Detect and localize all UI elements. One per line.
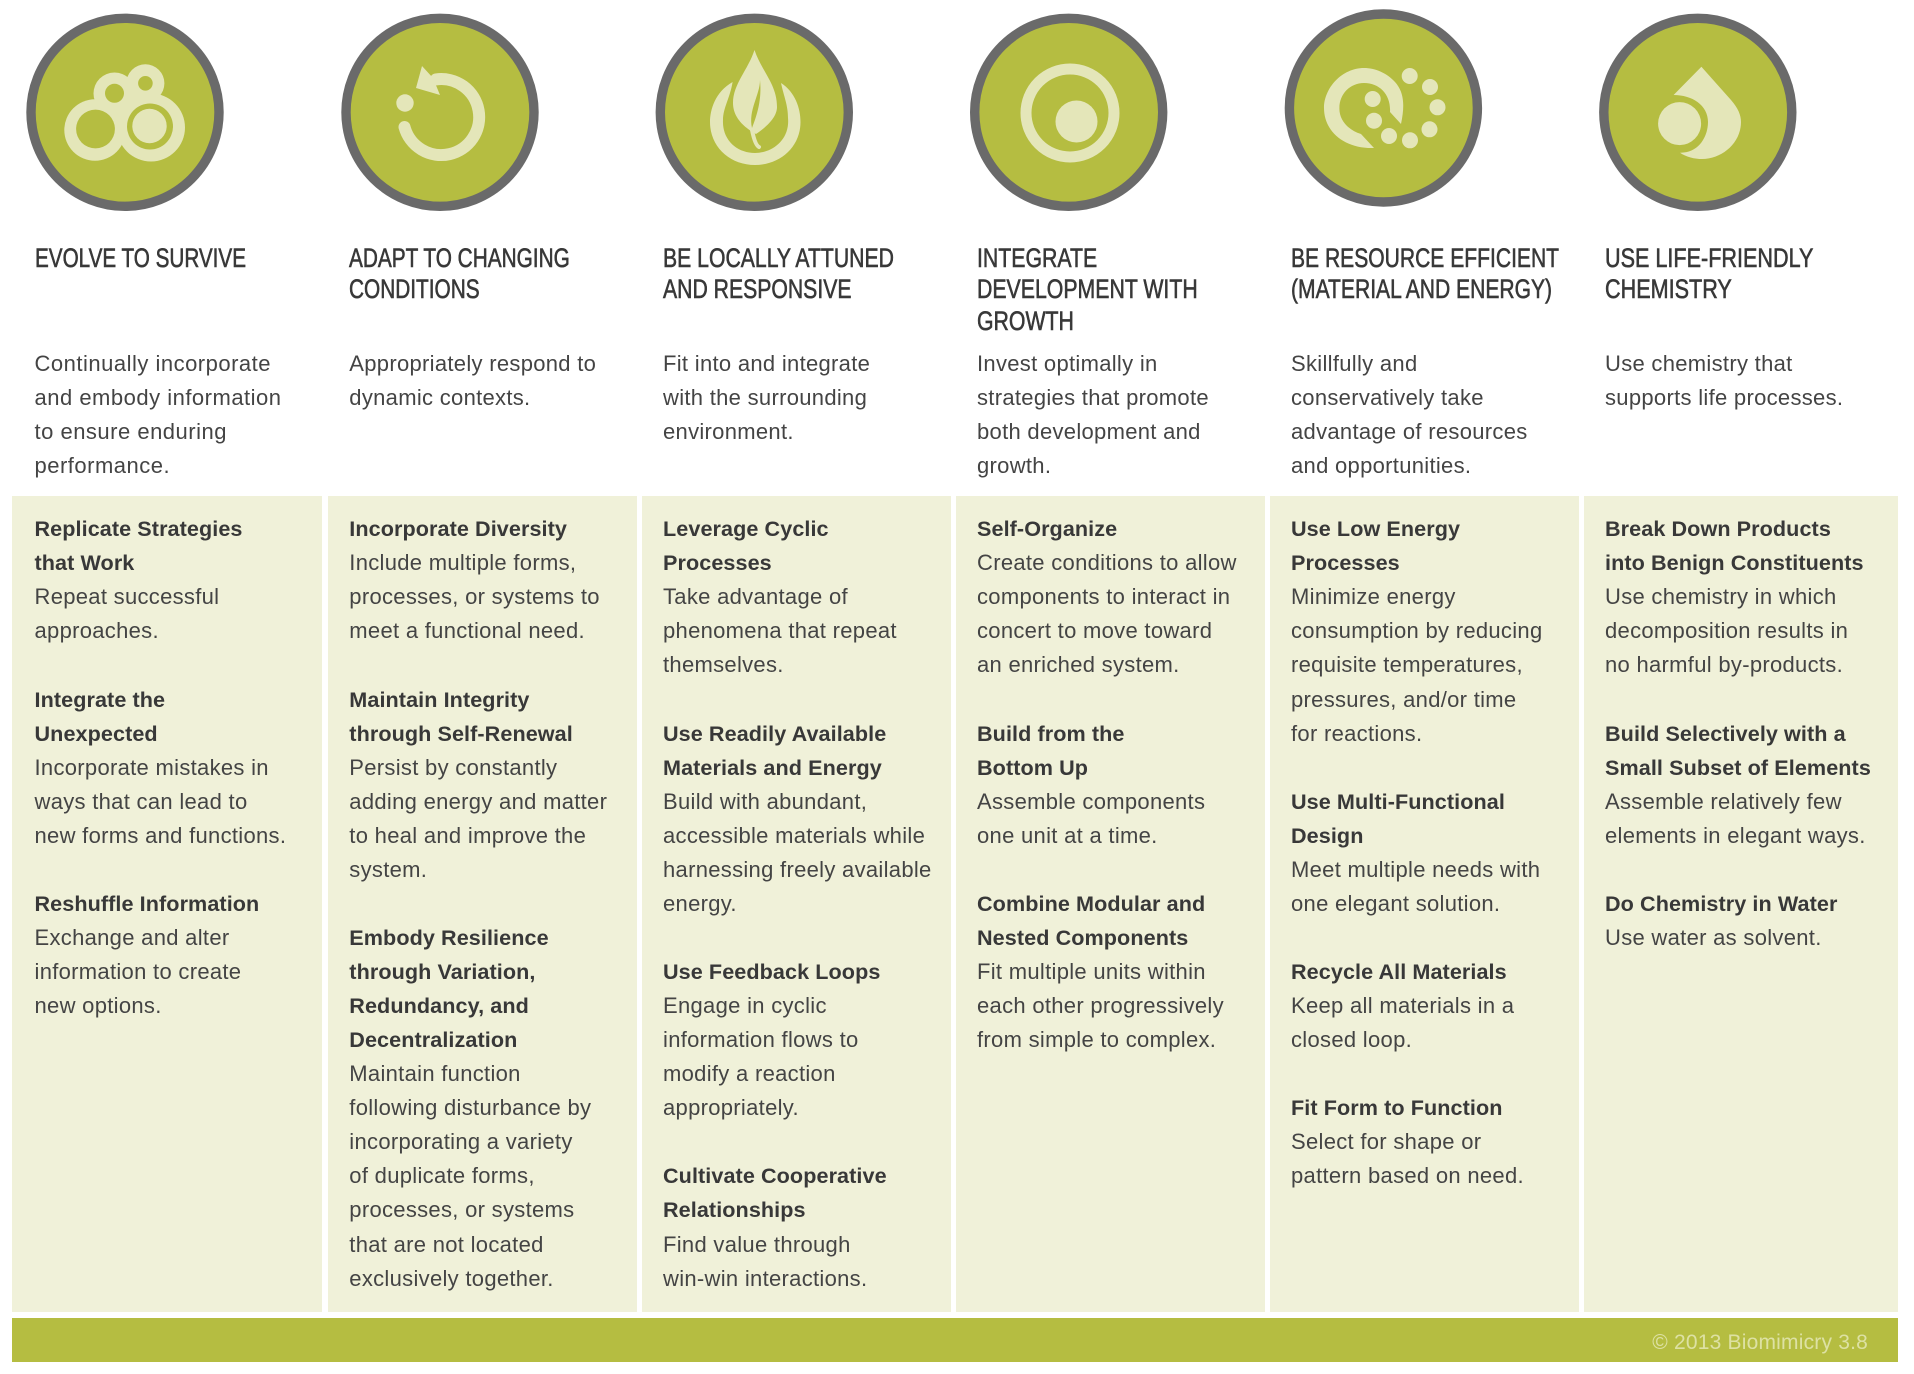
- item: leverage cyclic processes: Processes: [663, 550, 772, 575]
- item: readily available materials: harnessing freely available: [663, 857, 932, 882]
- intro text: evolve to survive: to ensure enduring: [34, 419, 227, 444]
- item: reshuffle information: [34, 891, 259, 1018]
- icon: be resource efficient: [1289, 14, 1477, 202]
- item: feedback loops: Engage in cyclic: [663, 993, 827, 1018]
- panel: evolve to survive strategies: [12, 496, 322, 1312]
- item: chemistry in water: Use water as solvent.: [1605, 925, 1822, 950]
- item: fit form to function: Fit Form to Function: [1291, 1095, 1502, 1120]
- item: embody resilience: exclusively together.: [349, 1266, 554, 1291]
- item: build from the bottom up: Build from the: [977, 721, 1124, 746]
- intro text: evolve to survive: performance.: [34, 453, 170, 478]
- item: fit form to function: pattern based on need.: [1291, 1163, 1524, 1188]
- item: leverage cyclic processes: Leverage Cyclic: [663, 516, 829, 541]
- item: embody resilience: Decentralization: [349, 1027, 517, 1052]
- item: chemistry in water: Do Chemistry in Water: [1605, 891, 1837, 916]
- item: incorporate diversity: Include multiple forms,: [349, 550, 576, 575]
- icon: use life-friendly chemistry: [1604, 18, 1792, 206]
- heading: use life-friendly chemistry: USE LIFE-FRIENDLY: [1605, 243, 1813, 273]
- item: incorporate diversity: processes, or systems to: [349, 584, 600, 609]
- item: low energy processes: requisite temperatures,: [1291, 652, 1523, 677]
- item: reshuffle information: information to create: [34, 959, 241, 984]
- heading: be resource efficient: [1291, 243, 1559, 304]
- item: self-organize: concert to move toward: [977, 618, 1212, 643]
- heading: be locally attuned and responsive: AND RESPONSIVE: [663, 274, 852, 304]
- item: self-organize: Create conditions to allow: [977, 550, 1237, 575]
- item: low energy processes: consumption by reducing: [1291, 618, 1542, 643]
- intro text: resource efficient: advantage of resources: [1291, 419, 1528, 444]
- item: chemistry in water: [1605, 891, 1838, 950]
- item: replicate strategies: that Work: [34, 550, 134, 575]
- item: self-organize: Self-Organize: [977, 516, 1117, 541]
- item: embody resilience: processes, or systems: [349, 1197, 574, 1222]
- item: cooperative relationships: win-win interactions.: [663, 1266, 867, 1291]
- heading: adapt to changing conditions: CONDITIONS: [349, 274, 480, 304]
- intro text: locally attuned: [663, 350, 870, 444]
- item: embody resilience: Maintain function: [349, 1061, 521, 1086]
- item: leverage cyclic processes: Take advantage of: [663, 584, 848, 609]
- item: recycle all materials: Keep all materials in a: [1291, 993, 1514, 1018]
- heading: adapt to changing conditions: ADAPT TO CHANGING: [349, 243, 570, 273]
- item: benign constituents: Use chemistry in which: [1605, 584, 1837, 609]
- item: multi-functional design: Meet multiple needs with: [1291, 857, 1540, 882]
- item: readily available materials: Build with abundant,: [663, 789, 867, 814]
- item: replicate strategies: approaches.: [34, 618, 159, 643]
- item: embody resilience: incorporating a variety: [349, 1129, 573, 1154]
- item: modular and nested: from simple to complex.: [977, 1027, 1216, 1052]
- item: build from the bottom up: Assemble components: [977, 789, 1205, 814]
- intro text: integrate development: strategies that promote: [977, 385, 1209, 410]
- icon: integrate development with growth: [975, 18, 1163, 206]
- item: self-organize: [977, 516, 1237, 677]
- item: multi-functional design: [1291, 789, 1540, 916]
- item: incorporate diversity: Incorporate Diversity: [349, 516, 567, 541]
- item: integrate the unexpected: [34, 686, 286, 848]
- item: low energy processes: Use Low Energy: [1291, 516, 1460, 541]
- item: embody resilience: through Variation,: [349, 959, 536, 984]
- item: modular and nested: Fit multiple units within: [977, 959, 1206, 984]
- item: modular and nested: Combine Modular and: [977, 891, 1205, 916]
- item: feedback loops: Use Feedback Loops: [663, 959, 880, 984]
- heading: use life-friendly chemistry: [1605, 243, 1814, 304]
- panel: locally attuned strategies: [642, 496, 951, 1312]
- item: multi-functional design: Design: [1291, 823, 1363, 848]
- panel: adapt strategies: [328, 496, 637, 1312]
- item: maintain integrity: Maintain Integrity: [349, 686, 530, 712]
- intro text: life-friendly chemistry: Use chemistry that: [1605, 350, 1793, 376]
- item: reshuffle information: Exchange and alter: [34, 925, 229, 950]
- item: modular and nested: each other progressively: [977, 993, 1224, 1018]
- item: reshuffle information: new options.: [34, 993, 162, 1018]
- panel: life-friendly chemistry strategies: [1584, 496, 1898, 1312]
- heading: evolve to survive: EVOLVE TO SURVIVE: [34, 243, 246, 273]
- icon: evolve to survive: [31, 18, 219, 206]
- item: feedback loops: [663, 959, 880, 1120]
- heading: be locally attuned and responsive: [662, 243, 894, 304]
- item: fit form to function: [1291, 1095, 1524, 1188]
- item: maintain integrity: through Self-Renewal: [349, 721, 573, 746]
- intro text: adapt: dynamic contexts.: [349, 385, 530, 410]
- item: multi-functional design: one elegant solution.: [1291, 891, 1500, 916]
- intro text: life-friendly chemistry: supports life processes.: [1605, 385, 1843, 410]
- heading: use life-friendly chemistry: CHEMISTRY: [1605, 274, 1732, 304]
- intro text: integrate development: growth.: [977, 453, 1051, 478]
- intro text: integrate development: Invest optimally in: [977, 350, 1158, 376]
- item: modular and nested: Nested Components: [977, 925, 1188, 950]
- item: embody resilience: Embody Resilience: [349, 925, 549, 950]
- intro text: resource efficient: conservatively take: [1291, 385, 1484, 410]
- icons row: [26, 9, 1796, 211]
- item: integrate the unexpected: Incorporate mistakes in: [34, 755, 269, 780]
- item: maintain integrity: [349, 686, 607, 882]
- item: low energy processes: Minimize energy: [1291, 584, 1456, 609]
- intro text: evolve to survive: [34, 350, 282, 478]
- intro text: life-friendly chemistry: [1605, 350, 1843, 410]
- item: maintain integrity: to heal and improve the: [349, 823, 586, 848]
- item: feedback loops: appropriately.: [663, 1095, 799, 1120]
- item: self-organize: an enriched system.: [977, 652, 1180, 677]
- heading: be locally attuned and responsive: BE LOCALLY ATTUNED: [663, 243, 894, 273]
- footer bar: [12, 1318, 1898, 1362]
- intro text: resource efficient: Skillfully and: [1291, 350, 1417, 376]
- item: incorporate diversity: meet a functional need.: [349, 618, 585, 643]
- item: maintain integrity: adding energy and matter: [349, 789, 607, 814]
- item: build selectively: Small Subset of Elements: [1605, 755, 1871, 780]
- item: benign constituents: [1605, 516, 1864, 677]
- item: integrate the unexpected: Integrate the: [34, 686, 165, 712]
- item: integrate the unexpected: new forms and functions.: [34, 823, 286, 848]
- intro text: locally attuned: with the surrounding: [663, 385, 867, 410]
- item: low energy processes: pressures, and/or time: [1291, 686, 1516, 712]
- item: leverage cyclic processes: [663, 516, 897, 677]
- icon: be locally attuned: [660, 18, 848, 206]
- item: feedback loops: modify a reaction: [663, 1061, 836, 1086]
- item: benign constituents: decomposition results in: [1605, 618, 1848, 643]
- heading: integrate development with growth: DEVELOPMENT WITH: [977, 274, 1198, 304]
- intro text: resource efficient: and opportunities.: [1291, 453, 1471, 478]
- item: readily available materials: Use Readily Available: [663, 721, 886, 746]
- item: embody resilience: that are not located: [349, 1232, 544, 1256]
- intro text: resource efficient: [1291, 350, 1528, 478]
- item: feedback loops: information flows to: [663, 1027, 859, 1052]
- intro text: evolve to survive: and embody information: [34, 385, 282, 410]
- item: build from the bottom up: [977, 721, 1205, 848]
- intro text: locally attuned: environment.: [663, 419, 794, 444]
- item: cooperative relationships: Cultivate Cooperative: [663, 1163, 887, 1188]
- heading: integrate development with growth: [977, 243, 1198, 336]
- intro text: adapt: [349, 350, 596, 410]
- item: cooperative relationships: Relationships: [663, 1197, 806, 1222]
- heading: be resource efficient: BE RESOURCE EFFICIENT: [1291, 243, 1559, 273]
- intro text: locally attuned: Fit into and integrate: [663, 350, 870, 376]
- item: recycle all materials: [1291, 959, 1514, 1052]
- panel: integrate development strategies: [956, 496, 1265, 1312]
- icon: adapt to changing conditions: [346, 18, 534, 206]
- item: build selectively: elements in elegant ways.: [1605, 823, 1866, 848]
- item: incorporate diversity: [349, 516, 600, 643]
- item: build from the bottom up: one unit at a time.: [977, 823, 1158, 848]
- item: readily available materials: energy.: [663, 891, 737, 916]
- item: integrate the unexpected: ways that can lead to: [34, 789, 247, 814]
- heading: be resource efficient: (MATERIAL AND ENERGY): [1291, 274, 1552, 304]
- item: recycle all materials: closed loop.: [1291, 1027, 1412, 1052]
- item: low energy processes: for reactions.: [1291, 721, 1422, 746]
- item: replicate strategies: Repeat successful: [34, 584, 219, 609]
- heading: integrate development with growth: GROWTH: [977, 306, 1074, 336]
- item: embody resilience: following disturbance by: [349, 1095, 591, 1120]
- intro text: adapt: Appropriately respond to: [349, 350, 596, 376]
- item: maintain integrity: system.: [349, 857, 427, 882]
- item: benign constituents: into Benign Constituents: [1605, 550, 1864, 575]
- item: recycle all materials: Recycle All Materials: [1291, 959, 1507, 984]
- item: reshuffle information: Reshuffle Information: [34, 891, 259, 916]
- item: self-organize: components to interact in: [977, 584, 1230, 609]
- item: build selectively: Assemble relatively few: [1605, 789, 1842, 814]
- item: leverage cyclic processes: themselves.: [663, 652, 784, 677]
- item: integrate the unexpected: Unexpected: [34, 721, 158, 746]
- item: leverage cyclic processes: phenomena that repeat: [663, 618, 897, 643]
- item: readily available materials: Materials and Energy: [663, 755, 882, 780]
- item: cooperative relationships: Find value through: [663, 1232, 851, 1256]
- item: readily available materials: accessible materials while: [663, 823, 925, 848]
- item: replicate strategies: Replicate Strategies: [34, 516, 243, 541]
- item: build from the bottom up: Bottom Up: [977, 755, 1088, 780]
- heading: integrate development with growth: INTEGRATE: [977, 243, 1097, 273]
- item: maintain integrity: Persist by constantly: [349, 755, 557, 780]
- item: readily available materials: [663, 721, 932, 916]
- item: build selectively: Build Selectively with a: [1605, 721, 1846, 746]
- item: fit form to function: Select for shape or: [1291, 1129, 1481, 1154]
- item: build selectively: [1605, 721, 1871, 848]
- item: low energy processes: Processes: [1291, 550, 1400, 575]
- item: multi-functional design: Use Multi-Functional: [1291, 789, 1505, 814]
- item: modular and nested: [977, 891, 1224, 1052]
- item: low energy processes: [1291, 516, 1542, 746]
- intro text: integrate development: both development and: [977, 419, 1201, 444]
- item: replicate strategies: [34, 516, 243, 643]
- item: benign constituents: Break Down Products: [1605, 516, 1831, 541]
- intro text: evolve to survive: Continually incorporate: [34, 350, 271, 376]
- item: benign constituents: no harmful by-products.: [1605, 652, 1843, 677]
- heading: adapt to changing conditions: [348, 243, 570, 304]
- item: embody resilience: Redundancy, and: [349, 993, 529, 1018]
- item: embody resilience: of duplicate forms,: [349, 1163, 535, 1188]
- intro text: integrate development: [977, 350, 1209, 478]
- item: embody resilience: [349, 925, 591, 1291]
- panel: resource efficient strategies: [1270, 496, 1579, 1312]
- item: cooperative relationships: [663, 1163, 887, 1291]
- copyright: © 2013 Biomimicry 3.8: [1652, 1331, 1868, 1354]
